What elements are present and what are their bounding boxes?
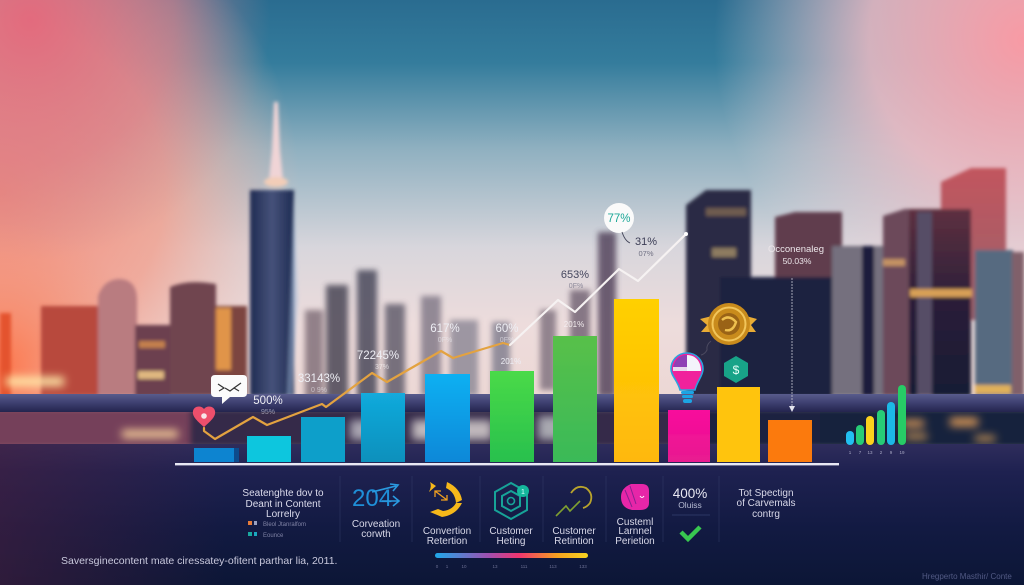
metric: customer heting: Heting bbox=[497, 536, 525, 547]
mini bar chart: 1 bbox=[849, 450, 852, 455]
progress scale: 13 bbox=[492, 564, 498, 569]
annotation with down arrow: 50.03% bbox=[783, 256, 812, 266]
legend: Bleol Jtanralfom bbox=[263, 522, 306, 528]
mini bar chart: 9 bbox=[890, 450, 893, 455]
icon: dollar hexagon: $ bbox=[733, 363, 740, 377]
data labels: 95% bbox=[261, 409, 275, 416]
metric: conversion retention: Retertion bbox=[427, 536, 467, 547]
data labels: 0F% bbox=[569, 283, 583, 290]
background sky bbox=[0, 0, 1024, 450]
progress scale: 133 bbox=[579, 564, 587, 569]
metric: conversation growth: 204 bbox=[352, 485, 392, 512]
data labels: 33143% bbox=[298, 373, 340, 385]
dark lower panel bbox=[0, 444, 1024, 585]
callout: 77% bbox=[604, 203, 634, 243]
metric: customer retention bbox=[552, 487, 596, 547]
progress scale: 1 bbox=[446, 564, 449, 569]
data labels bbox=[253, 236, 657, 416]
data labels: 201% bbox=[501, 357, 521, 366]
data labels: 0F% bbox=[500, 337, 514, 344]
annotation with down arrow bbox=[768, 244, 824, 412]
mini bar chart: 19 bbox=[899, 450, 905, 455]
text block: total spection: contrg bbox=[752, 509, 780, 520]
icon: chat bubble bbox=[211, 375, 247, 404]
data labels: 31% bbox=[635, 236, 657, 248]
trend line bbox=[204, 232, 688, 439]
data labels: 653% bbox=[561, 269, 589, 281]
data labels: 60% bbox=[495, 323, 519, 335]
spire bbox=[250, 102, 298, 396]
metric: customer heting: Customer bbox=[489, 526, 533, 537]
metric: 400% with check mark: Oluiss bbox=[678, 500, 702, 510]
text block: total spection: Tot Spectign bbox=[738, 488, 794, 499]
callout: 77%: 77% bbox=[607, 213, 631, 225]
metric: conversation growth: Corveation bbox=[352, 519, 400, 530]
column dividers bbox=[340, 476, 719, 542]
text block: intro bbox=[242, 488, 324, 520]
metric: conversation growth bbox=[352, 484, 400, 540]
data labels: 07% bbox=[638, 249, 654, 258]
metric: conversion retention bbox=[423, 482, 471, 547]
text block: intro: Deant in Content bbox=[245, 499, 321, 510]
source credit: Hregperto Masthir/ Conte bbox=[922, 572, 1012, 581]
progress scale: 113 bbox=[549, 564, 557, 569]
mini bar chart bbox=[846, 385, 906, 455]
icon: heart bbox=[193, 407, 215, 427]
metric: custom funnel retention: Perietion bbox=[615, 536, 655, 547]
mini bar chart: 13 bbox=[867, 450, 873, 455]
metric: custom funnel retention: Larnnel bbox=[618, 526, 652, 537]
data labels: 72245% bbox=[357, 350, 399, 362]
text block: total spection bbox=[737, 488, 795, 520]
chart baseline bbox=[175, 463, 839, 465]
data labels: 0 9% bbox=[311, 387, 327, 394]
data labels: 201% bbox=[564, 320, 584, 329]
metric: customer retention: Retintion bbox=[554, 536, 594, 547]
text block: total spection: of Carvemals bbox=[737, 498, 795, 509]
icon: dollar hexagon bbox=[724, 356, 748, 383]
data labels: 37% bbox=[375, 364, 389, 371]
data labels: 0F% bbox=[438, 337, 452, 344]
blurred city skyline bbox=[0, 102, 1024, 400]
metric: customer retention: Customer bbox=[552, 526, 596, 537]
mini bar chart: 7 bbox=[859, 450, 862, 455]
progress scale: 111 bbox=[521, 564, 528, 569]
legend: Eounce bbox=[263, 533, 284, 539]
text block: intro: Seatenghte dov to bbox=[242, 488, 324, 499]
mini bar chart: 2 bbox=[880, 450, 883, 455]
icon: lightbulb bbox=[671, 353, 703, 403]
guard rail bbox=[0, 377, 1024, 448]
metric: customer heting: 1 bbox=[521, 489, 525, 496]
metric: custom funnel retention: Custeml bbox=[617, 517, 653, 528]
data labels: 500% bbox=[253, 395, 283, 407]
icon: gold badge bbox=[700, 303, 757, 355]
progress scale bbox=[435, 553, 588, 569]
legend bbox=[248, 521, 306, 539]
text block: intro: Lorrelry bbox=[266, 509, 300, 520]
metric: 400% with check mark: 400% bbox=[673, 486, 707, 501]
metric: conversion retention: Convertion bbox=[423, 526, 471, 537]
metric: 400% with check mark bbox=[672, 486, 710, 539]
progress scale: 0 bbox=[436, 564, 439, 569]
progress scale: 10 bbox=[461, 564, 467, 569]
annotation with down arrow: Occonenaleg bbox=[768, 244, 824, 255]
footnote: Saversginecontent mate ciressatey-ofitent parthar lia, 2011. bbox=[61, 555, 337, 567]
metric: conversation growth: corwth bbox=[361, 529, 391, 540]
metric: custom funnel retention bbox=[615, 484, 655, 547]
bar chart bbox=[194, 299, 812, 462]
data labels: 617% bbox=[430, 323, 460, 335]
metric: customer heting bbox=[489, 483, 533, 547]
